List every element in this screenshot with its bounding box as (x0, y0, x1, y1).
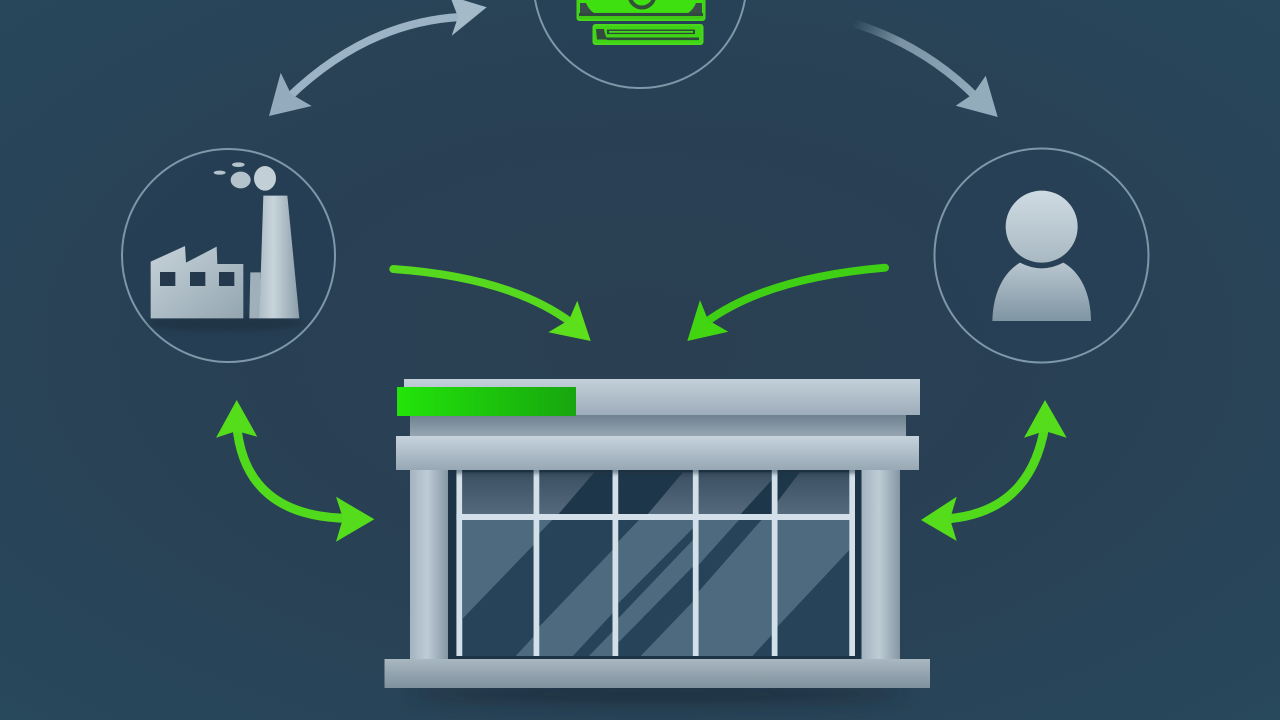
smoke (214, 162, 276, 191)
window mullions (456, 470, 855, 656)
lower glass panes (462, 520, 849, 656)
icon: cash stack (578, 0, 704, 44)
circle: customer (934, 148, 1148, 362)
storefront building (384, 379, 930, 703)
arrow: money to customer (853, 23, 998, 117)
icon: factory (147, 162, 303, 331)
circle: money at top (534, 0, 746, 88)
lower banknote (594, 25, 702, 44)
right column (862, 470, 900, 660)
upper wall (410, 414, 906, 438)
icon: person (992, 191, 1091, 321)
arrow: factory to store (393, 269, 591, 341)
arrow: factory and store two-way (216, 400, 374, 542)
upper banknote (578, 0, 704, 20)
lower cornice (396, 436, 919, 470)
circle: factory supplier (122, 149, 335, 362)
green sign bar (397, 387, 576, 416)
arrow: supplier to and from money (269, 0, 487, 116)
factory hall (151, 246, 243, 318)
upper glass panes (462, 472, 849, 514)
window wall (448, 470, 861, 659)
arrow: customer to store (687, 268, 885, 341)
left column (410, 470, 448, 660)
chimney (259, 196, 299, 318)
base plinth (384, 659, 930, 688)
arrow: customer and store two-way (921, 400, 1067, 541)
roof cornice (404, 379, 920, 415)
annex (249, 272, 261, 318)
